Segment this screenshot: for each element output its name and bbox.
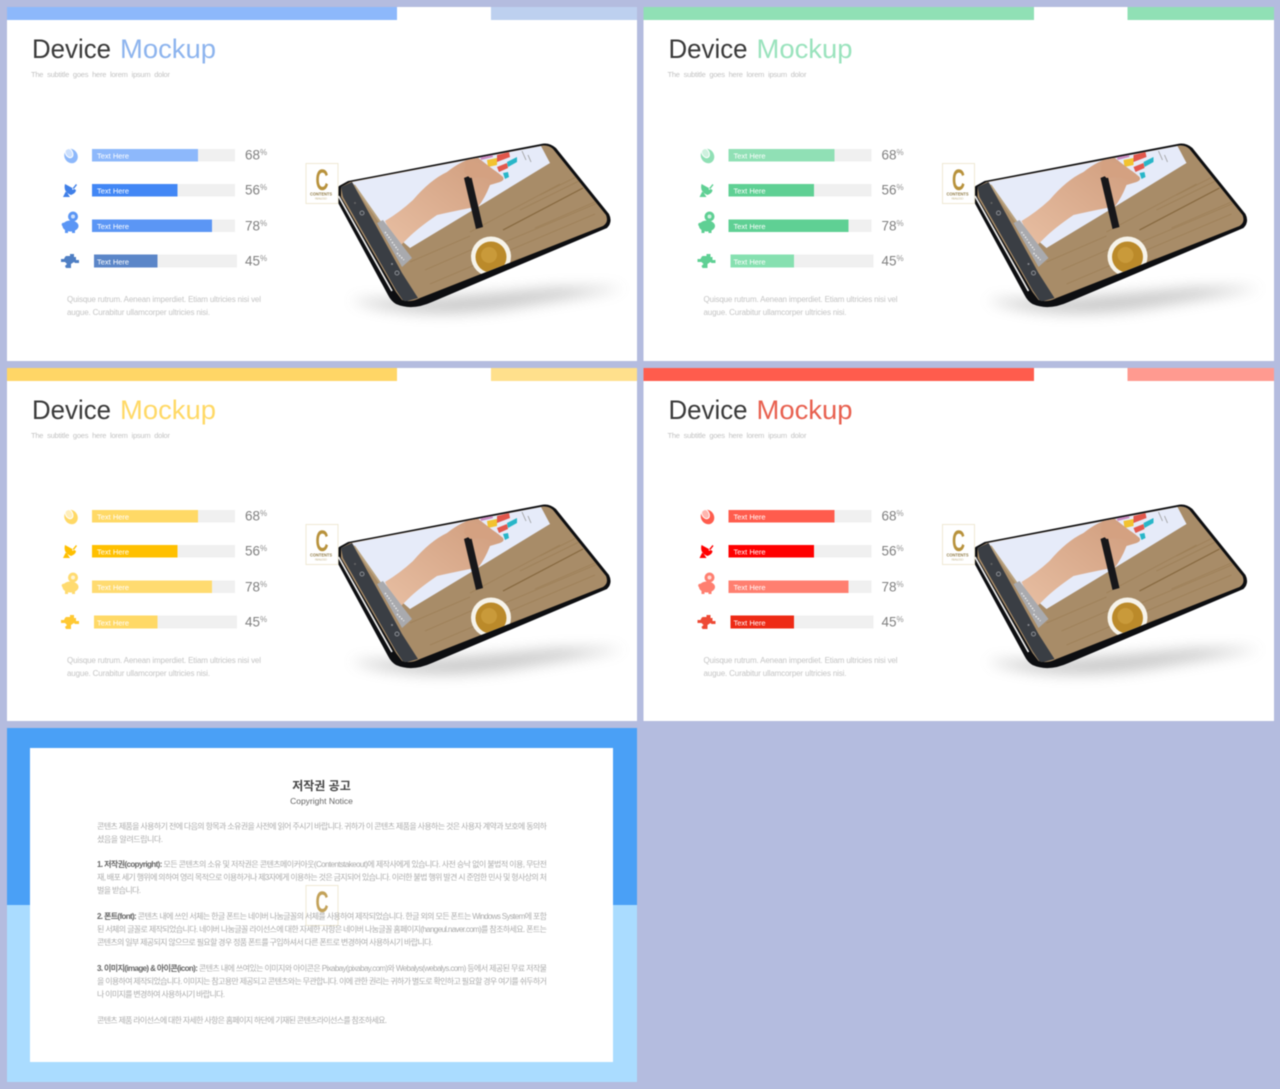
phone mockup [972,501,1262,674]
bar: 68%: % [896,148,904,157]
logo [942,524,974,564]
heading [668,34,852,64]
heading: Device [32,34,111,64]
bar: 68% [728,148,904,162]
icon: satellite dish [63,545,77,558]
icon: piggy bank [698,572,715,594]
phone mockup [335,501,625,674]
bar: 56%: 56 [245,182,260,198]
bar: 45%: 45 [882,254,897,268]
bar: 68%: % [896,509,904,518]
logo: C [316,525,328,558]
body text: Quisque rutrum. Aenean imperdiet. Etiam ultricies nisi vel [704,656,898,665]
logo: C [316,886,328,919]
bar: 78%: Text Here [97,222,129,231]
subtitle: The subtitle goes here lorem ipsum dolor [31,70,170,79]
phone mockup [335,140,625,313]
notice text: 콘텐츠의 일부 제공되지 않으므로 필요할 경우 정품 폰트를 구입하셔서 다른 폰트로 변경하여 사용하시기 바랍니다. [97,937,433,947]
bar: 78%: Text Here [97,583,129,592]
bar: 45%: Text Here [97,258,129,266]
notice text: 1. 저작권(copyright): 모든 콘텐츠의 소유 및 저작권은 콘텐츠메이커아웃(Contentstakeout)에 제작사에게 있습니다. 사전 승낙 없이 불법적 이용, 무단전 [97,859,547,869]
heading [32,34,216,64]
body text [67,656,261,678]
body text: Quisque rutrum. Aenean imperdiet. Etiam ultricies nisi vel [67,656,261,665]
logo [306,886,338,926]
bar: 56%: % [260,183,267,192]
logo: C [316,164,328,197]
subheading: Copyright Notice [290,796,353,806]
icon: puzzle [698,615,716,629]
bar: 68%: 68 [245,508,260,524]
bar: 78%: 78 [245,580,260,594]
body text [704,295,898,317]
notice text: 3. 이미지(image) & 아이콘(icon): 콘텐츠 내에 쓰여있는 이미지와 아이콘은 Pixabay(pixabay.com)와 Webalys(webalys.com) 등에서 제공된 무료 저작물 [97,963,547,973]
bar: 45%: Text Here [734,618,766,628]
bar: 56% [92,544,267,558]
notice text: 된 서체의 글꼴로 제작되었습니다. 네이버 나눔글꼴 라이선스에 대한 자세한 사항은 네이버 나눔글꼴 홈페이지(hangeul.naver.com)를 참조하세요. 폰트는 [97,924,547,934]
icon: satellite dish [63,184,77,197]
bar: 56%: Text Here [97,548,129,556]
logo [306,524,338,564]
notice text: 재, 배포 세기 행위에 의하여 영리 목적으로 이용하거나 제3자에게 이용하는 것은 금지되어 있습니다. 이러한 불법 행위 발견 시 준엄한 민사 및 형사상의 처 [97,872,547,882]
notice text: 2. 폰트(font): 콘텐츠 내에 쓰인 서체는 한글 폰트는 네이버 나눔글꼴의 서체를 사용하여 제작되었습니다. 한글 외의 모든 폰트는 Windows System에 포함 [97,911,548,921]
bar: 78% [92,580,267,594]
bar: 45%: 45 [882,614,897,630]
icon: mouse [62,507,80,527]
bar: 78%: % [896,580,904,589]
body text: augue. Curabitur ullamcorper ultricies nisi. [704,669,846,678]
heading: 저작권 공고 [292,778,351,793]
bar: 56% [92,182,267,198]
icon: piggy bank [698,212,715,233]
notice text: 셨음을 알려드립니다. [97,834,163,844]
panel: green device mockup [644,7,1274,361]
bar: 68% [92,508,267,524]
bar: 45%: 45 [245,254,260,268]
bar: 56%: 56 [882,182,897,198]
heading [32,395,216,425]
bar: 78%: Text Here [734,583,766,592]
bar: 68% [92,148,267,162]
panel: red device mockup [644,368,1274,721]
bar: 45% [730,254,904,268]
body text: Quisque rutrum. Aenean imperdiet. Etiam ultricies nisi vel [704,295,898,304]
heading: Mockup [120,34,216,64]
body text: augue. Curabitur ullamcorper ultricies nisi. [67,308,210,317]
heading: Mockup [756,395,852,425]
bar: 68%: 68 [882,508,897,524]
logo: REAL LOGO [952,196,964,200]
logo: C [952,525,965,558]
top colour bar [7,368,637,381]
top colour bar [644,7,1274,20]
icon: mouse [698,507,717,527]
blue background [7,728,637,1082]
bar: 45%: % [260,615,267,624]
bar: 68%: % [260,509,267,518]
bar: 56%: % [260,544,267,553]
bar: 68%: 68 [245,148,260,162]
bar: 45%: Text Here [97,618,129,628]
bar: 78%: 78 [245,218,260,234]
bar: 56%: 56 [882,544,897,558]
bar: 68%: 68 [882,148,897,162]
icon: piggy bank [62,572,78,594]
bar: 56% [728,544,904,558]
logo: REAL LOGO [952,558,964,562]
phone mockup [972,140,1262,313]
icon: satellite dish [700,545,714,558]
icon: puzzle [61,254,79,268]
icon: piggy bank [62,212,78,233]
bar: 45%: % [896,254,904,263]
bar: 68%: Text Here [97,152,129,160]
bar: 45%: 45 [245,614,260,630]
icon: puzzle [698,254,716,268]
notice text: 콘텐츠 제품 라이선스에 대한 자세한 사항은 홈페이지 하단에 기재된 콘텐츠라이선스를 참조하세요. [97,1015,387,1025]
icon: satellite dish [700,184,714,197]
logo [306,164,338,204]
bar: 56%: Text Here [97,186,129,196]
top colour bar [644,368,1274,381]
bar: 78%: % [260,219,267,228]
heading: Mockup [756,34,852,64]
heading: Device [668,395,748,425]
logo: CONTENTS [310,192,332,196]
body text: Quisque rutrum. Aenean imperdiet. Etiam ultricies nisi vel [67,295,261,304]
logo: CONTENTS [946,192,968,196]
bar: 68%: Text Here [97,512,129,522]
heading: Device [668,34,748,64]
heading: Device [32,395,111,425]
icon: mouse [698,146,717,166]
bar: 68%: Text Here [734,512,766,522]
logo: C [952,164,965,197]
notice text: 을 이용하여 제작되었습니다. 이미지는 참고용만 제공되고 콘텐츠와는 무관합니다. 이에 관한 권리는 귀하가 별도로 확인하고 필요할 경우 여기를 쉬두하거 [97,976,547,986]
bar: 56%: % [896,183,904,192]
bar: 68%: Text Here [734,152,766,160]
bar: 56%: 56 [245,544,260,558]
logo: REAL LOGO [315,196,328,200]
white sheet [30,748,613,1062]
subtitle: The subtitle goes here lorem ipsum dolor [668,70,807,79]
bar: 45%: Text Here [734,258,766,266]
subtitle: The subtitle goes here lorem ipsum dolor [31,431,170,440]
notice text: 벌을 받습니다. [97,885,141,895]
notice text: 콘텐츠 제품을 사용하기 전에 다음의 항목과 소유권을 사전에 읽어 주시기 바랍니다. 귀하가 이 콘텐츠 제품을 사용하는 것은 사용자 계약과 보호에 동의하 [97,821,548,831]
bar: 56% [728,182,904,198]
top colour bar [7,7,637,20]
icon: puzzle [61,615,79,629]
icon: mouse [62,146,80,166]
bar: 78% [728,218,904,234]
bar: 56%: Text Here [734,186,766,196]
bar: 78%: % [260,580,267,589]
bar: 78%: Text Here [734,222,766,231]
notice text: 나 이미지를 변경하여 사용하시기 바랍니다. [97,989,225,999]
logo: CONTENTS [946,552,968,558]
panel: blue device mockup [7,7,637,361]
body text: augue. Curabitur ullamcorper ultricies nisi. [67,669,210,678]
heading [668,395,852,425]
bar: 78% [92,218,267,234]
bar: 45%: % [260,254,267,263]
body text [704,656,898,678]
body text: augue. Curabitur ullamcorper ultricies nisi. [704,308,846,317]
bar: 78%: % [896,219,904,228]
logo [942,164,974,204]
bar: 68% [728,508,904,524]
bar: 45% [730,614,904,630]
body text [67,295,261,317]
bar: 45% [94,254,267,268]
bar: 68%: % [260,148,267,157]
logo: REAL LOGO [315,558,328,562]
subtitle: The subtitle goes here lorem ipsum dolor [668,431,807,440]
heading: Mockup [120,395,216,425]
panel: yellow device mockup [7,368,637,721]
notice text [97,821,548,1025]
bar: 78%: 78 [882,218,897,234]
bar: 56%: Text Here [734,548,766,556]
bar: 56%: % [896,544,904,553]
logo: CONTENTS [310,552,332,558]
bar: 45% [94,614,267,630]
bar: 45%: % [896,615,904,624]
bar: 78%: 78 [882,580,897,594]
panel: copyright notice [7,728,637,1082]
bar: 78% [728,580,904,594]
